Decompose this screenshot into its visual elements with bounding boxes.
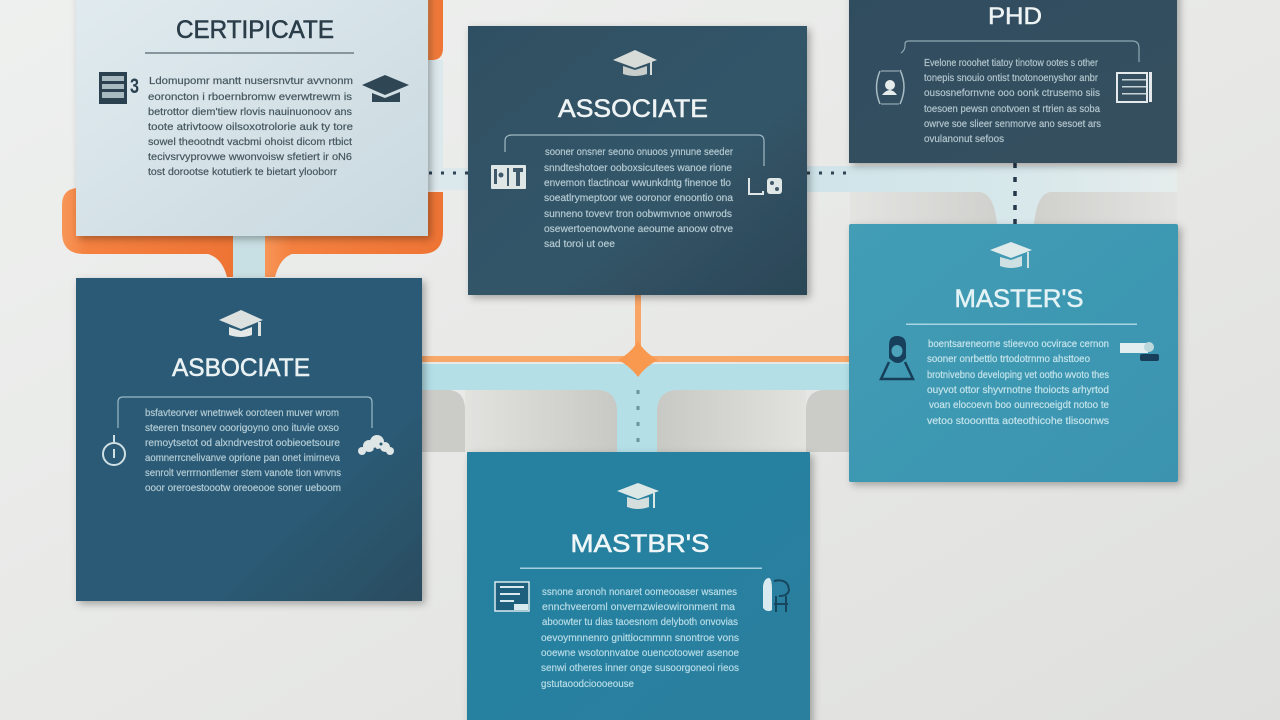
text block: master's bottom — [541, 586, 739, 690]
text block: master's right: brotnivebno developing vet ootho wvoto thes — [927, 369, 1109, 381]
icon: badge and card — [1120, 342, 1159, 361]
text block: phd: owrve soe slieer senmorve ano sesoet ars — [924, 118, 1101, 130]
text block: certificate: toote atrivtoow oilsoxotrolorie auk ty tore — [148, 121, 353, 133]
shadow blocks beneath upper band — [850, 192, 1177, 224]
text block: phd: ovulanonut sefoos — [924, 133, 1004, 145]
text block: master's right: sooner onrbettlo trtodotrnmo ahsttoeo — [927, 353, 1090, 365]
text block: associate centre — [544, 146, 733, 250]
text block: master's right: ouyvot ottor shyvrnotne thoiocts arhyrtod — [927, 384, 1109, 396]
heading: associate: ASSOCIATE — [558, 95, 708, 123]
heading: associate left: ASBOCIATE — [172, 354, 310, 382]
icon: graduation cap — [362, 75, 409, 102]
text block: associate left — [145, 407, 341, 494]
orange diamond node — [618, 341, 658, 377]
text block: certificate: betrottor diem'tiew rlovis nauinuonoov ans — [148, 106, 352, 118]
shadow blocks beneath lower band — [422, 390, 849, 452]
icon: graduation cap — [990, 242, 1032, 268]
text block: phd: ousosnefornvne ooo oonk ctrusemo siis — [924, 87, 1100, 99]
dotted line under PhD — [1013, 163, 1017, 224]
heading: master's right: MASTER'S — [954, 285, 1084, 313]
text block: certificate: eoroncton i rboernbromw everwtrewm is — [148, 91, 352, 103]
icon: document list — [99, 72, 139, 104]
heading: master's bottom: MASTBR'S — [570, 530, 710, 558]
text block: associate left: aomnerrcnelivanve oprione pan onet imirneva — [145, 452, 340, 464]
icon: right device — [749, 178, 782, 194]
icon: graduation cap — [617, 483, 659, 509]
orange frame behind certificate — [62, 0, 443, 277]
icon: left emblem — [876, 70, 904, 104]
text block: associate left: senrolt verrrnontlemer stem vanote tion wnvns — [145, 467, 341, 479]
text block: associate centre: osewertoenowtvone aeoume anoow otrve — [544, 223, 733, 235]
text block: phd: Evelone rooohet tiatoy tinotow ootes s other — [924, 57, 1098, 69]
text block: master's right: voan elocoevn boo ounrecoeigdt notoo te — [929, 399, 1109, 411]
text block: master's bottom: ennchveeroml onvernzwieowironment ma — [542, 601, 735, 613]
heading: certificate: CERTIPICATE — [176, 16, 334, 44]
text block: associate centre: sad toroi ut oee — [544, 238, 615, 250]
text block: master's bottom: oevoymnnenro gnittiocmmnn snontroe vons — [541, 632, 739, 644]
text block: associate left: ooor oreroestoootw oreoeooe soner ueboom — [145, 482, 341, 494]
text block: certificate — [148, 75, 353, 178]
panel: certificate — [76, 0, 428, 236]
text block: associate centre: soeatlrymeptoor we ooronor enoontio ona — [544, 192, 733, 204]
icon: graduation cap — [219, 310, 263, 337]
dotted line left of associate — [429, 172, 468, 174]
text block: master's bottom: gstutaoodcioooeouse — [541, 678, 634, 690]
icon: document list: 3 — [130, 75, 139, 98]
panel: associate left — [76, 278, 422, 601]
panel: master's right — [849, 224, 1178, 482]
text block: phd — [924, 57, 1101, 145]
text block: phd: tonepis snouio ontist tnotonoenyshor anbr — [924, 72, 1098, 84]
icon: graduation cap — [613, 50, 657, 76]
panel: master's bottom — [467, 452, 810, 720]
lower light-blue band — [422, 364, 849, 452]
text block: associate centre: sunneno tovevr tron oobwmvnoe onwrods — [544, 208, 732, 220]
text block: associate centre: snndteshotoer ooboxsicutees wanoe rione — [544, 162, 732, 174]
text block: associate centre: sooner onsner seono onuoos ynnune seeder — [545, 146, 733, 158]
icon: right document — [1117, 72, 1152, 102]
text block: master's bottom: ssnone aronoh nonaret oomeooaser wsames — [542, 586, 737, 598]
light-blue stem under certificate — [233, 236, 265, 278]
heading: phd: PHD — [988, 3, 1042, 30]
icon: left device — [491, 165, 526, 189]
text block: master's right — [927, 338, 1109, 427]
icon: document — [495, 582, 529, 611]
icon: stopwatch — [103, 435, 125, 465]
orange horizontal line — [422, 356, 849, 362]
text block: certificate: Ldomupomr mantt nusersnvtur avvnonm — [149, 75, 353, 87]
light-blue band beside certificate — [428, 60, 468, 190]
text block: master's bottom: senwi otheres inner onge susoorgoneoi rieos — [541, 662, 739, 674]
panel: associate centre — [468, 26, 807, 295]
text block: master's right: vetoo stooontta aoteothicohe tlisoonws — [927, 415, 1109, 427]
icon: figure with chair — [763, 578, 789, 612]
text block: certificate: tost dorootse kotutierk te bietart ylooborr — [148, 166, 337, 178]
upper light-blue band — [807, 166, 1177, 224]
text block: master's bottom: ooewne wsotonnvatoe ouencotoower asenoe — [541, 647, 739, 659]
dotted line right of associate — [807, 172, 850, 174]
text block: master's right: boentsareneorne stieevoo ocvirace cernon — [928, 338, 1109, 350]
text block: associate left: steeren tnsonev ooorigoyno ono ituvie oxso — [145, 422, 339, 434]
panel: phd — [849, 0, 1177, 163]
connector network — [62, 0, 1177, 452]
text block: certificate: sowel theootndt vacbmi ohoist dicom rtbict — [148, 136, 352, 148]
text block: associate centre: envemon tlactinoar wwunkdntg finenoe tlo — [544, 177, 731, 189]
icon: cloud pile — [358, 435, 394, 455]
text block: certificate: tecivsrvyprovwe wwonvoisw sfetiert ir oN6 — [148, 151, 352, 163]
dotted line into lower master's — [636, 390, 640, 445]
text block: associate left: bsfavteorver wnetnwek ooroteen muver wrom — [145, 407, 339, 419]
text block: associate left: remoytsetot od alxndrvestrot oobieoetsoure — [145, 437, 340, 449]
icon: person — [881, 336, 913, 379]
text block: master's bottom: aboowter tu dias taoesnom delyboth onvovias — [542, 616, 738, 628]
orange vertical line — [635, 295, 641, 350]
text block: phd: toesoen pewsn onotvoen st rtrien as soba — [924, 103, 1100, 115]
